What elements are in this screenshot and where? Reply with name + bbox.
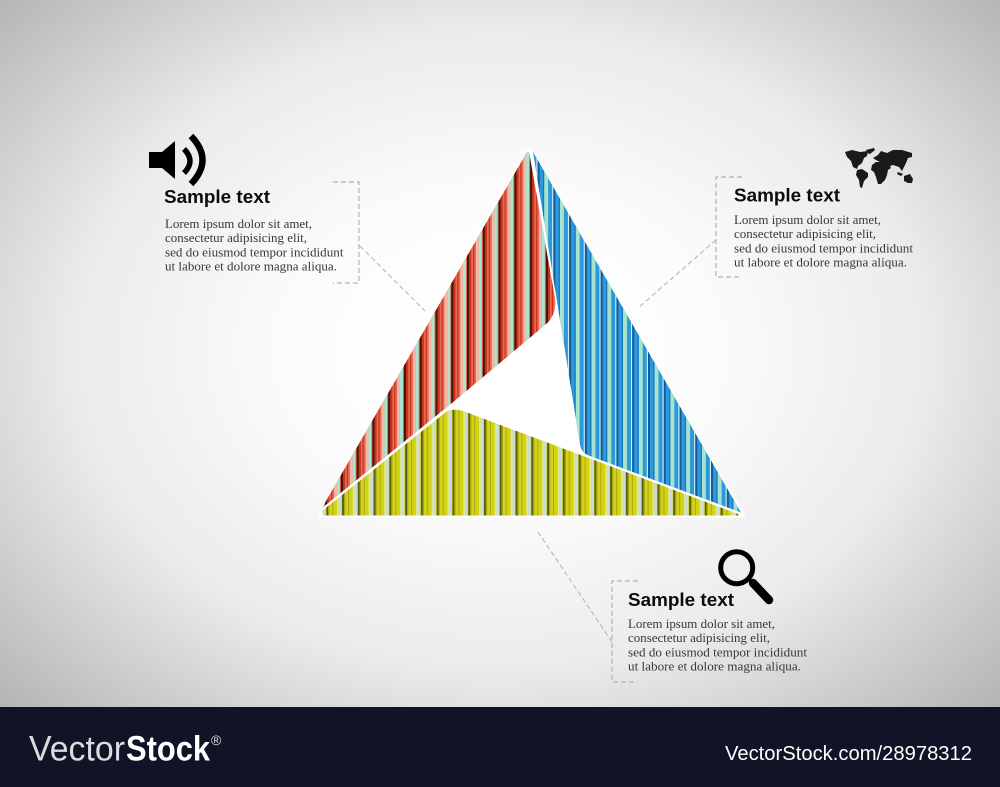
- text block: Lorem ipsum dolor sit amet,: [628, 616, 775, 631]
- icon: world map: [845, 148, 913, 188]
- dashed bracket and leader: [638, 177, 742, 308]
- text block: consectetur adipisicing elit,: [628, 630, 770, 645]
- text block: sed do eiusmod tempor incididunt: [165, 244, 344, 259]
- text block: sed do eiusmod tempor incididunt: [734, 240, 913, 255]
- image id: VectorStock.com/28978312: [725, 743, 972, 765]
- dashed bracket and leader: [333, 182, 425, 311]
- logo: Stock: [126, 728, 210, 768]
- logo: ®: [211, 732, 222, 748]
- segment: blue: [533, 152, 741, 512]
- text block: [628, 616, 807, 674]
- triangle white base: [320, 150, 743, 516]
- text block: consectetur adipisicing elit,: [165, 230, 307, 245]
- text block: ut labore et dolore magna aliqua.: [734, 254, 907, 270]
- icon: magnifying glass: [721, 552, 769, 600]
- logo: [29, 728, 222, 768]
- text block: ut labore et dolore magna aliqua.: [628, 658, 801, 674]
- logo: Vector: [29, 728, 125, 768]
- heading: Sample text: [164, 186, 270, 207]
- text block: ut labore et dolore magna aliqua.: [165, 258, 337, 274]
- triangle diagram: [305, 150, 760, 517]
- text block: Lorem ipsum dolor sit amet,: [734, 212, 881, 227]
- segment: red: [322, 152, 556, 508]
- text block: consectetur adipisicing elit,: [734, 226, 876, 241]
- text block: [165, 216, 344, 274]
- icon: speaker: [149, 136, 202, 184]
- text block: sed do eiusmod tempor incididunt: [628, 644, 807, 659]
- segment: yellow: [322, 410, 739, 516]
- panel: bottom callout: [536, 529, 807, 682]
- footer bar: [0, 707, 1000, 787]
- dashed bracket and leader: [536, 529, 638, 682]
- heading: Sample text: [628, 589, 734, 610]
- text block: Lorem ipsum dolor sit amet,: [165, 216, 312, 231]
- panel: top left callout: [149, 136, 425, 311]
- heading: Sample text: [734, 184, 840, 206]
- panel: top right callout: [638, 148, 913, 308]
- text block: [734, 212, 913, 270]
